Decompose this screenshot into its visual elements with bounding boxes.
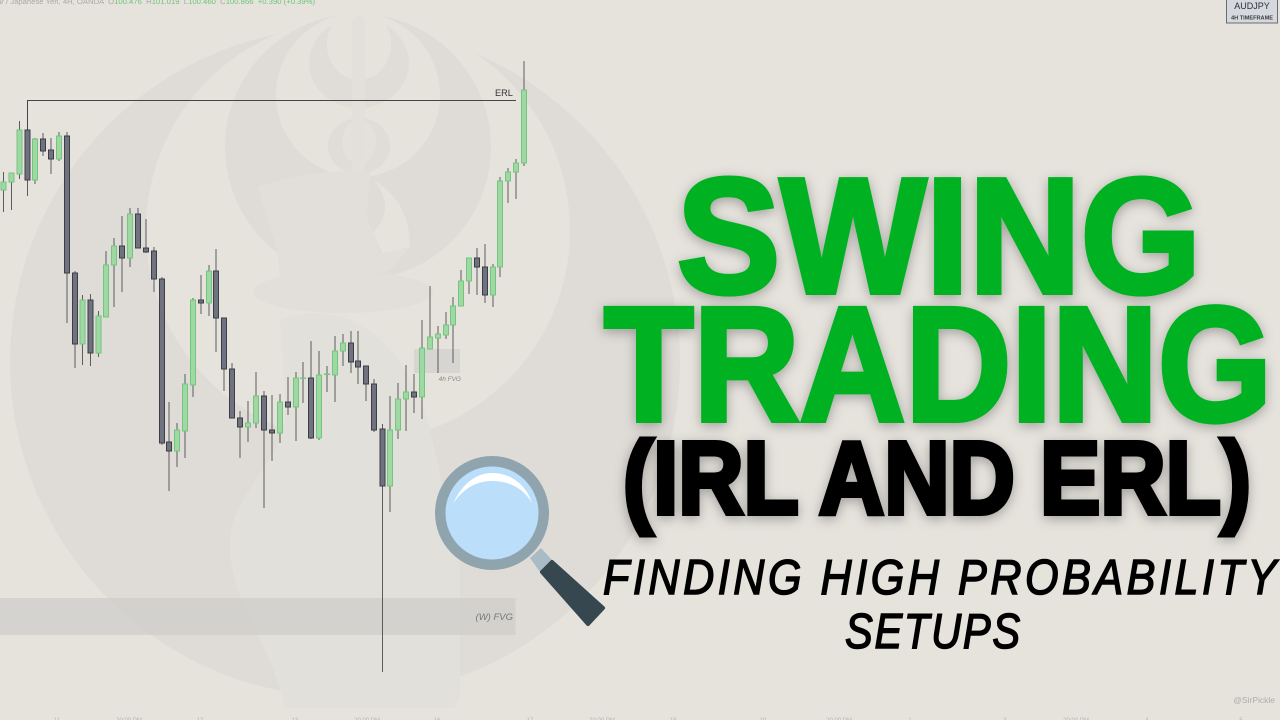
subtitle line 2: SETUPS: [845, 604, 1020, 659]
ERL level line: ERL: [495, 88, 513, 98]
timeframe badge: [1226, 0, 1278, 23]
timeframe badge: 4H TIMEFRAME: [1231, 16, 1273, 22]
icon: magnifying glass: [435, 456, 603, 624]
watermark logo: [10, 8, 680, 708]
title: SWING: SWING: [677, 144, 1201, 328]
4h FVG zone: 4h FVG: [439, 376, 461, 383]
subtitle line 1: FINDING HIGH PROBABILITY: [603, 549, 1279, 605]
candlestick chart: [1, 61, 526, 672]
weekly FVG zone: [0, 598, 516, 635]
weekly FVG zone: (W) FVG: [476, 612, 513, 623]
time axis labels: [54, 718, 1243, 720]
timeframe badge: AUDJPY: [1234, 1, 1270, 11]
4h FVG zone: [414, 349, 461, 383]
credit: @SirPickle: [1233, 695, 1275, 705]
ERL level line: [28, 88, 516, 130]
